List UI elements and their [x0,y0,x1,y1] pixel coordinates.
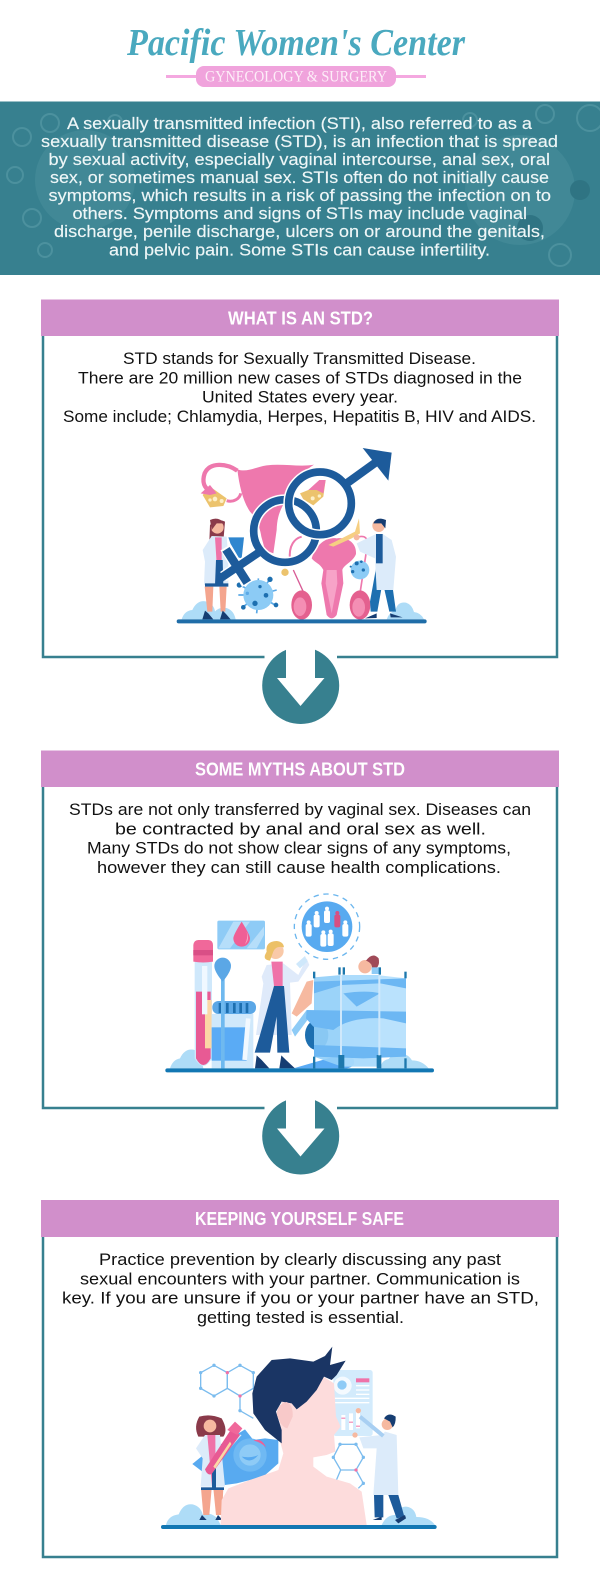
illustration: patient and doctors [161,1347,437,1529]
patient [292,955,379,1068]
swab and jar [212,958,256,1068]
medical chart [333,1370,373,1436]
banner background [0,102,600,275]
ground [165,1068,434,1072]
arrow 2 glyph [277,1094,324,1156]
central patient [221,1347,367,1525]
virus large [237,577,278,613]
clouds [182,601,424,619]
panel 3 heading: KEEPING YOURSELF SAFE [195,1209,404,1229]
panel 2 text: however they can still cause health complications. [97,858,501,877]
clouds [170,1050,429,1068]
logo wordmark: Pacific Women's Center [126,22,466,64]
logo rule [166,75,426,78]
condom [192,1429,278,1485]
panel 3 text: key. If you are unsure if you or your partner have an STD, [62,1289,539,1308]
intro banner [0,102,600,275]
male anatomy [281,518,370,620]
panel 2 text: Many STDs do not show clear signs of any symptoms, [87,839,511,858]
molecule hexagons [199,1364,365,1488]
arrow 1 white gap [264,650,337,662]
panel 3 frame [43,1220,557,1557]
banner paragraph: and pelvic pain. Some STIs can cause infertility. [109,242,490,260]
ground [177,619,427,623]
symbol female [219,500,316,584]
panel 1 text [63,349,536,426]
uterus [201,465,326,553]
panel 2 text [69,800,531,877]
banner paragraph: discharge, penile discharge, ulcers on or around the genitals, [54,223,545,241]
panel 2 text: STDs are not only transferred by vaginal sex. Diseases can [69,800,531,819]
doctor [255,941,309,1068]
female doctor [196,1415,242,1520]
male doctor [354,519,403,618]
panel 2 text: be contracted by anal and oral sex as well. [115,819,486,838]
symbol male [289,448,392,535]
logo [126,22,466,87]
arrow 1 glyph [277,644,324,706]
panel 3 text: Practice prevention by clearly discussing any past [99,1250,501,1269]
illustration: clinic exam [165,894,434,1072]
virus small [350,560,369,579]
banner paragraph [41,115,558,260]
clouds [166,1504,435,1525]
panel 3 text: sexual encounters with your partner. Communication is [80,1269,520,1288]
panel: myths [41,750,559,1108]
arrow 1 [262,644,339,724]
arrow 2 circle [262,1098,339,1174]
male doctor [352,1408,406,1523]
panel: keeping yourself safe [41,1200,559,1557]
people circle [294,894,360,959]
arrow 1 circle [262,647,339,724]
panel 1 heading: WHAT IS AN STD? [228,308,373,328]
panel 1 header bar [41,300,559,336]
test tube [193,940,213,1066]
ground [161,1525,437,1529]
logo tagline pill [196,66,396,87]
panel 1 text: Some include; Chlamydia, Herpes, Hepatitis B, HIV and AIDS. [63,407,536,426]
panel 3 text: getting tested is essential. [197,1308,404,1327]
banner paragraph: by sexual activity, especially vaginal intercourse, anal sex, oral [48,151,550,169]
banner paragraph: others. Symptoms and signs of STIs may include vaginal [72,205,527,223]
logo tagline: GYNECOLOGY & SURGERY [205,68,387,86]
panel 1 frame [43,320,557,657]
panel 2 frame [43,770,557,1108]
arrow 2 [262,1094,339,1174]
blood card [217,921,265,949]
banner paragraph: sex, or sometimes manual sex. STIs often do not initially cause [50,169,549,187]
panel 3 text [62,1250,539,1327]
panel 1 text: There are 20 million new cases of STDs diagnosed in the [78,368,522,387]
panel 2 heading: SOME MYTHS ABOUT STD [195,760,405,780]
banner paragraph: sexually transmitted disease (STD), is an infection that is spread [41,133,558,151]
banner virus watermarks [7,105,600,266]
privacy screens [306,967,407,1068]
panel 2 header bar [41,750,559,787]
banner paragraph: A sexually transmitted infection (STI), also referred to as a [67,115,532,133]
female doctor [202,519,244,619]
panel: what is an STD [41,300,559,657]
panel 3 header bar [41,1200,559,1237]
panel 1 text: STD stands for Sexually Transmitted Disease. [123,349,476,368]
illustration: gender symbols and reproductive anatomy [177,448,427,623]
banner paragraph: symptoms, which results in a risk of passing the infection on to [48,187,551,205]
panel 1 text: United States every year. [202,388,398,407]
